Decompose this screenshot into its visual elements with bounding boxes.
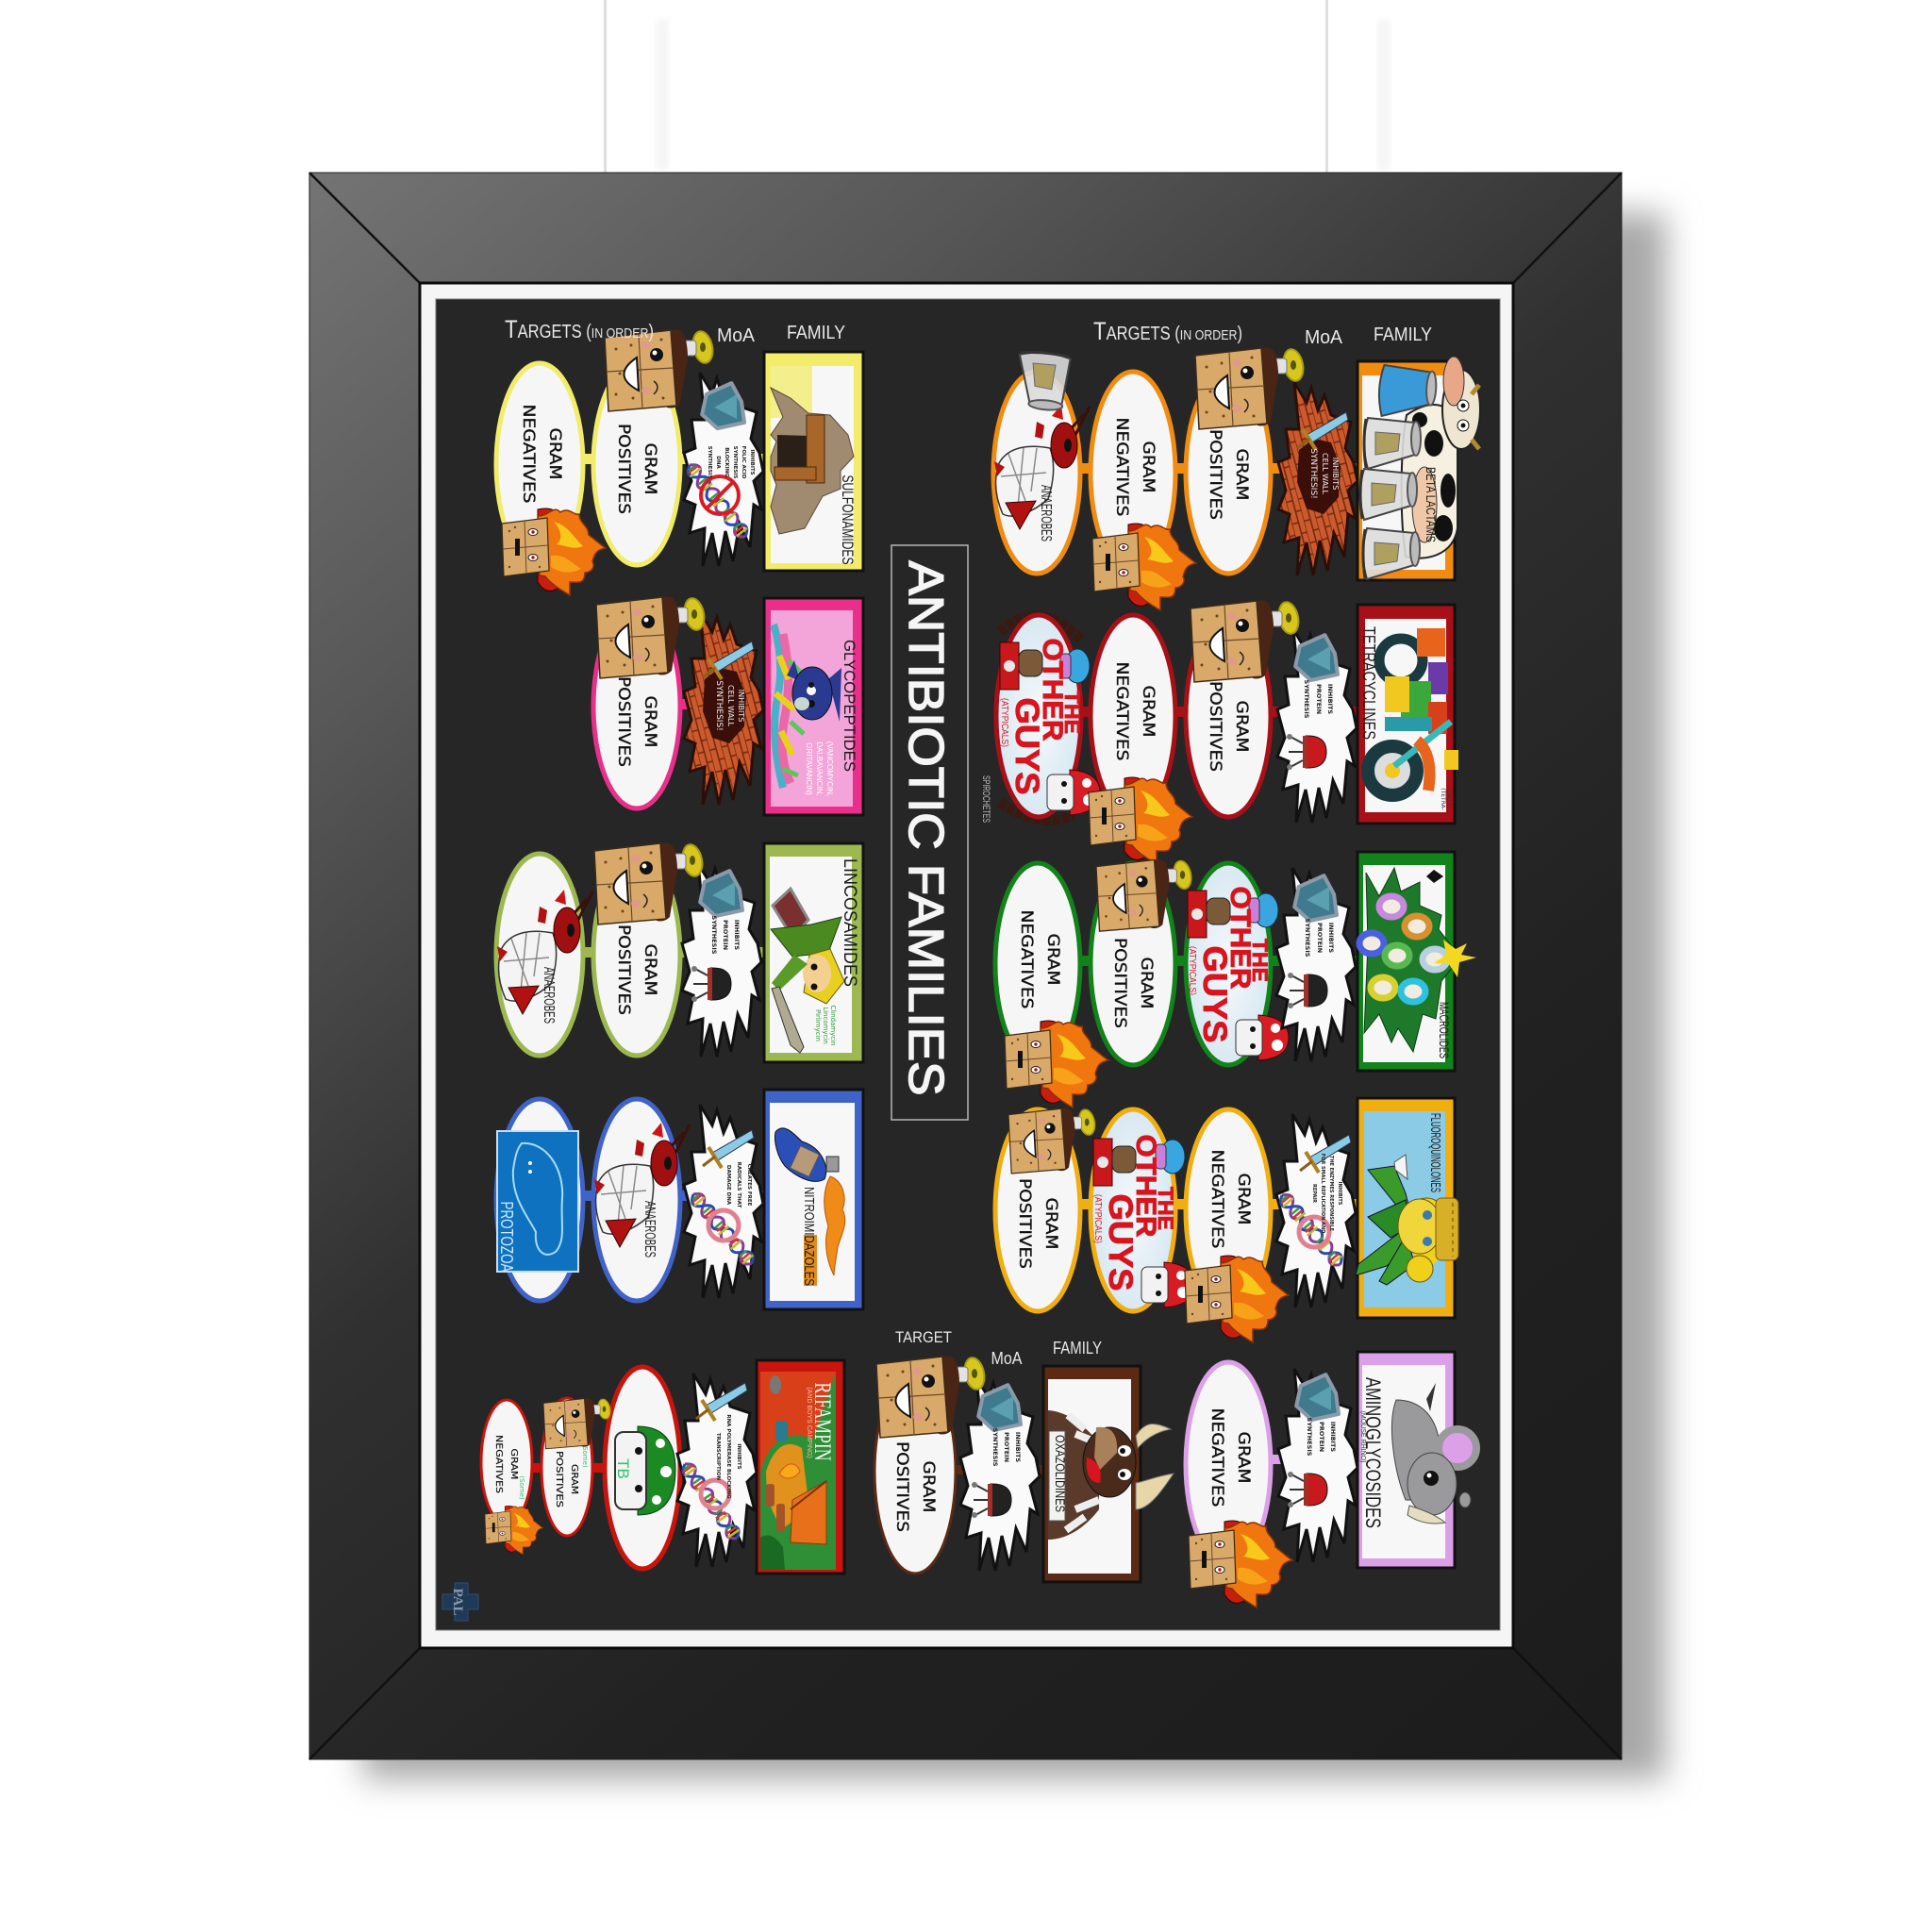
target: gram negatives [1091,372,1175,574]
moa burst: SYNTHESIS [732,446,738,478]
target: gram positives [593,854,680,1056]
target: gram negatives: GRAM [1043,933,1062,986]
icon: bucket on anaerobes [1015,351,1071,411]
target: gram positives: POSITIVES [1015,1178,1034,1269]
label: spirochetes: SPIROCHETES [980,775,991,823]
family card: lincosamides: Lincomycin [822,1007,829,1044]
family card: glycopeptides: DALBAVANCIN, [815,741,824,796]
family card: oxazolidines: OXAZOLIDINES [1053,1435,1068,1512]
logo: PAL: PAL [450,1589,465,1615]
family card: nitroimidazoles: NITROIMIDAZOLES [801,1187,817,1286]
target: gram positives: GRAM [1137,957,1156,1009]
family card: rifampin: RIFAMPIN [809,1383,835,1460]
moa burst: FOLIC ACID [741,446,746,479]
target: the other guys [1186,863,1289,1065]
family card: glycopeptides: ORITAVANCIN) [805,742,813,795]
family card: tetracyclines: TETRACYCLINES [1359,626,1378,740]
family card: beta lactams: BETA LACTAMS [1424,467,1439,542]
target: anaerobes [993,372,1090,574]
column headers: TARGETS (IN ORDER) [505,315,654,343]
family card: rifampin: (AND BOYS CAMPING) [806,1387,812,1458]
moa burst: INHIBITS [749,449,755,475]
column headers: FAMILY [1053,1339,1102,1357]
title [891,545,968,1120]
moa burst: protein synthesis: SYNTHESIS [710,916,718,955]
moa burst: replication enzymes [1276,1114,1356,1307]
column headers: MoA [717,325,756,346]
row: aminoglycosides [1186,1352,1476,1607]
target: gram positives: GRAM [641,943,659,996]
row: macrolides [995,852,1476,1108]
flame cracker: gram negative [1089,777,1192,864]
title: ANTIBIOTIC FAMILIES [898,560,953,1096]
target: gram negatives (some): NEGATIVES [493,1435,504,1493]
moa burst: BLOCKING [724,447,729,477]
target: the other guys: GUYS [1102,1194,1139,1291]
target: gram positives [995,1109,1080,1311]
row: fluoroquinolones [995,1098,1458,1342]
target: gram positives: POSITIVES [1206,429,1224,520]
target: gram negatives (some): (Some) [518,1475,525,1500]
moa burst: cell wall: CELL WALL [1321,453,1329,495]
moa burst: protein synthesis: SYNTHESIS [1304,919,1311,958]
row: rifampin [481,1360,844,1574]
target: gram negatives: GRAM [1139,441,1158,493]
target: the other guys: OTHER [1130,1134,1161,1238]
target: gram negatives: NEGATIVES [1208,1149,1226,1249]
target: anaerobes [593,1099,690,1301]
flame cracker: gram negative [485,1506,543,1555]
cracker: gram positive [543,1398,612,1449]
target: gram negatives: GRAM [1234,1173,1253,1225]
target: gram negatives: NEGATIVES [1112,417,1131,517]
target: gram negatives (some): GRAM [508,1449,519,1479]
moa burst: free radicals: RADICALS THAT [736,1162,741,1208]
flame cracker: gram negative [502,508,606,595]
target: the other guys: THE [1248,939,1272,982]
family card: aminoglycosides: AMINOGLYCOSIDES [1361,1377,1385,1528]
cracker: gram positive [605,329,715,411]
moa burst: replication enzymes: INHIBITS [1337,1182,1342,1206]
logo: PAL [442,1583,478,1621]
target: protozoa: PROTOZOA [497,1202,516,1272]
row: glycopeptides [593,596,863,815]
family card: sulfonamides [764,352,863,571]
target: protozoa [496,1099,583,1301]
target: gram positives: POSITIVES [892,1441,911,1532]
family card: glycopeptides: (VANCOMYCIN, [825,741,834,796]
column headers: MoA [1305,327,1343,348]
moa burst: protein synthesis: PROTEIN [1315,684,1323,714]
cracker: gram positive [1008,1108,1097,1174]
family card: tetracyclines [1357,605,1458,824]
target: the other guys: OTHER [1224,887,1256,990]
column headers: TARGET [895,1328,952,1346]
target: gram negatives [1186,1109,1271,1311]
target: gram negatives [496,363,583,565]
target: anaerobes [496,854,592,1056]
target: the other guys: THE [1060,691,1084,734]
family card: macrolides [1357,852,1476,1071]
target: gram negatives [1091,615,1175,817]
family card: aminoglycosides [1357,1352,1476,1568]
family card: tetracyclines: (TETRA- [1440,788,1446,810]
flame cracker: gram negative [1185,1256,1289,1342]
target: gram negatives: GRAM [545,427,564,480]
moa burst: protein synthesis [1277,629,1357,823]
target: gram positives: POSITIVES [614,424,633,514]
row: oxazolidines [874,1356,1174,1582]
target: gram positives (some) [541,1398,592,1536]
row: sulfonamides [496,329,863,595]
family card: aminoglycosides: (MOUSE RHINO) [1359,1411,1366,1462]
target: gram positives: GRAM [1232,448,1251,501]
moa burst: protein synthesis: INHIBITS [1327,923,1335,953]
picture frame [309,173,1622,1759]
target: gram positives [1186,615,1271,817]
cracker: gram positive [876,1356,987,1438]
target: gram negatives (some) [481,1400,532,1524]
flame cracker: gram negative [1092,524,1196,610]
frame shadow [362,213,1666,1779]
target: gram positives [874,1370,956,1574]
moa burst: protein synthesis [960,1377,1040,1571]
target: gram positives: POSITIVES [1110,938,1129,1028]
cracker: gram positive [1096,859,1193,931]
target: the other guys: (ATYPICALS) [1092,1194,1103,1243]
flame cracker: gram negative [1005,1021,1108,1108]
target: the other guys: GUYS [1196,945,1233,1042]
target: the other guys: (ATYPICALS) [1187,946,1197,995]
target: the other guys [996,615,1100,817]
moa burst: replication enzymes: THE ENZYMES RESPONSIBLE [1328,1156,1334,1232]
moa burst: cell wall [1278,382,1357,575]
moa burst: cell wall: CELL WALL [726,685,735,727]
family card: fluoroquinolones [1356,1098,1458,1318]
cracker: gram positive [1191,600,1301,682]
target: gram negatives: NEGATIVES [1017,909,1036,1009]
moa burst: protein synthesis [682,863,761,1057]
moa burst: cell wall: SYNTHESIS! [1308,448,1318,499]
family card: oxazolidines [1043,1366,1174,1582]
moa burst: RNA polymerase: RNA POLYMERASE BLOCKING [725,1414,731,1499]
target: tuberculosis mushroom [605,1367,680,1569]
moa burst: cell wall: INHIBITS [1331,458,1340,490]
moa burst: replication enzymes: FOR SMALL REPLICATION AND [1320,1154,1325,1233]
moa burst: free radicals [684,1105,763,1298]
target: gram positives: GRAM [1041,1197,1060,1250]
row: lincosamides [496,842,863,1062]
moa burst: protein synthesis: PROTEIN [1003,1432,1010,1462]
target: gram negatives: NEGATIVES [1208,1407,1226,1507]
row: nitroimidazoles [496,1090,863,1309]
moa burst: protein synthesis: INHIBITS [733,920,741,950]
target: gram positives: POSITIVES [1206,681,1224,772]
target: the other guys: (ATYPICALS) [999,698,1009,747]
moa burst: cell wall: SYNTHESIS! [714,680,724,731]
target: the other guys [1091,1109,1194,1311]
cracker: gram positive [596,596,707,678]
moa burst: replication enzymes: REPAIR [1311,1184,1317,1203]
family card: beta lactams [1357,357,1480,580]
row: tetracyclines [980,600,1458,864]
family card: lincosamides: Clindamycin [829,1005,837,1046]
target: gram negatives: NEGATIVES [1112,662,1131,760]
moa burst: RNA polymerase: INHIBITS [736,1443,741,1470]
target: anaerobes: ANAEROBES [641,1201,658,1257]
moa burst: RNA polymerase: TRANSCRIPTION [715,1433,721,1481]
target: gram positives: POSITIVES [614,924,633,1015]
target: gram positives (some): POSITIVES [554,1451,564,1507]
moa burst: protein synthesis: INHIBITS [1014,1432,1022,1462]
moa burst: cell wall [684,611,763,805]
target: gram positives: GRAM [1232,700,1251,753]
target: gram negatives: NEGATIVES [519,404,538,504]
moa burst: protein synthesis: PROTEIN [722,920,729,950]
target: gram positives (some): (Some) [581,1443,589,1468]
target: gram negatives: GRAM [1139,685,1158,738]
flame cracker: gram negative [1189,1521,1292,1607]
moa burst: protein synthesis: INHIBITS [1326,684,1334,714]
moa burst: free radicals: CREATES FREE [746,1164,752,1207]
icon: spirochete braid [1000,616,1081,821]
moa burst: cell wall: INHIBITS [737,690,745,722]
row: beta lactams [993,347,1480,610]
target: gram positives: GRAM [641,695,659,748]
family card: nitroimidazoles [764,1090,863,1309]
moa burst: protein synthesis: INHIBITS [1329,1422,1337,1452]
family card: glycopeptides: GLYCOPEPTIDES [841,640,858,772]
poster background [436,299,1500,1630]
target: anaerobes: ANAEROBES [1038,485,1054,541]
moa burst: free radicals: DAMAGE DNA [725,1165,731,1206]
moa burst: protein synthesis: SYNTHESIS [991,1428,999,1467]
column headers: TARGETS (IN ORDER) [1093,317,1242,345]
moa burst: protein synthesis [1278,1369,1357,1562]
family card: lincosamides [764,843,863,1062]
target: gram positives [593,605,680,808]
family card: macrolides: MACROLIDES [1437,1002,1452,1058]
target: gram positives [1186,372,1271,574]
column headers: MoA [991,1349,1023,1368]
target: tuberculosis mushroom: TB [614,1458,632,1479]
family card: lincosamides: LINCOSAMIDES [840,858,859,987]
moa burst: protein synthesis: PROTEIN [1318,1422,1325,1452]
family card: glycopeptides [764,598,863,815]
moa burst: protein synthesis: PROTEIN [1316,923,1324,953]
column headers [505,315,1432,1368]
target: the other guys: THE [1154,1187,1177,1230]
moa burst [684,373,763,566]
moa burst: RNA polymerase [677,1374,757,1567]
target: the other guys: OTHER [1037,638,1068,741]
family card: sulfonamides: SULFONAMIDES [839,475,857,564]
moa burst: protein synthesis [1276,868,1356,1061]
moa burst: SYNTHESIS [707,446,712,478]
target: gram positives (some): GRAM [569,1464,579,1494]
cracker: gram positive [1195,347,1306,429]
family card: rifampin [757,1360,844,1574]
target: gram positives: GRAM [641,442,659,495]
family card: tetracyclines: CYCLE) [1445,789,1452,809]
hanging wires [604,0,1391,174]
target: the other guys: GUYS [1008,698,1045,794]
target: gram positives: GRAM [919,1460,938,1513]
target: gram positives [593,363,680,565]
moa burst: protein synthesis: SYNTHESIS [1303,680,1310,719]
cracker: gram positive [594,842,705,924]
column headers: FAMILY [1374,325,1432,345]
moa burst: DNA [715,456,721,469]
target: gram negatives [1186,1362,1271,1566]
family card: lincosamides: Pirlimycin [814,1009,822,1041]
family card: fluoroquinolones: FLUOROQUINOLONES [1427,1113,1443,1192]
target: gram positives [1091,863,1175,1065]
target: anaerobes: ANAEROBES [541,967,557,1024]
target: gram negatives [995,863,1080,1065]
target: gram negatives: GRAM [1234,1431,1253,1484]
target: gram positives: POSITIVES [614,676,633,767]
column headers: FAMILY [787,323,845,343]
moa burst: protein synthesis: SYNTHESIS [1306,1418,1313,1457]
